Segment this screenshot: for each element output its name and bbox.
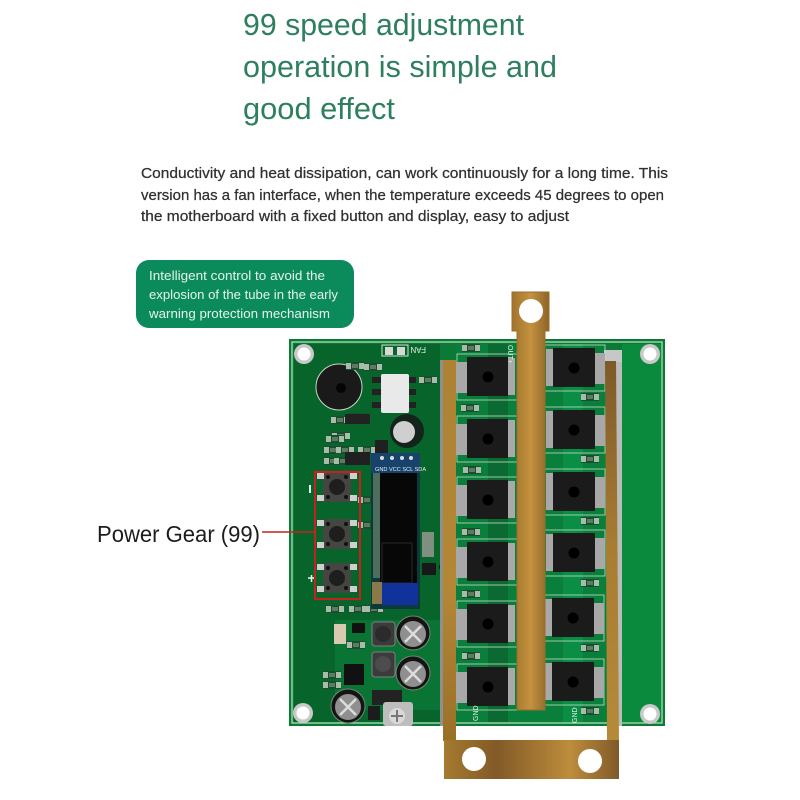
pcb base xyxy=(289,339,665,726)
mosfets left column xyxy=(456,354,519,710)
callout: Intelligent control to avoid the xyxy=(149,268,325,283)
copper busbar bottom xyxy=(443,360,619,779)
copper busbar center xyxy=(512,292,549,710)
title xyxy=(243,8,557,126)
description text: version has a fan interface, when the temperature exceeds 45 degrees to open xyxy=(141,187,664,204)
mosfets right column xyxy=(544,345,605,705)
oled display module xyxy=(371,453,426,609)
output markings: OUT+ xyxy=(506,345,513,364)
output markings xyxy=(473,345,579,723)
electrolytic capacitors lower xyxy=(331,616,430,723)
screw terminal xyxy=(383,702,413,726)
red highlight box xyxy=(315,472,360,599)
description text xyxy=(141,165,668,225)
callout: explosion of the tube in the early xyxy=(149,287,338,302)
small components xyxy=(323,362,447,720)
title: 99 speed adjustment xyxy=(243,8,525,42)
oled display module: GND VCC SCL SDA xyxy=(375,467,426,473)
buttons xyxy=(308,472,357,593)
callout: warning protection mechanism xyxy=(148,306,330,321)
title: good effect xyxy=(243,92,396,126)
mounting holes xyxy=(293,344,660,724)
inductors xyxy=(372,622,395,677)
output markings: GND xyxy=(473,705,480,721)
description text: Conductivity and heat dissipation, can work continuously for a long time. This xyxy=(141,165,668,182)
title: operation is simple and xyxy=(243,50,557,84)
fan connector xyxy=(382,345,426,356)
resistor clusters xyxy=(461,344,599,715)
electrolytic capacitor xyxy=(390,414,424,448)
fan connector: FAN xyxy=(410,345,426,354)
description text: the motherboard with a fixed button and display, easy to adjust xyxy=(141,208,570,225)
silver rails xyxy=(440,350,622,726)
output markings: GND xyxy=(572,707,579,723)
callout xyxy=(136,260,354,328)
power gear label: Power Gear (99) xyxy=(97,521,260,547)
buzzer xyxy=(316,364,362,410)
optocoupler xyxy=(372,374,416,413)
circuit board xyxy=(289,339,665,726)
